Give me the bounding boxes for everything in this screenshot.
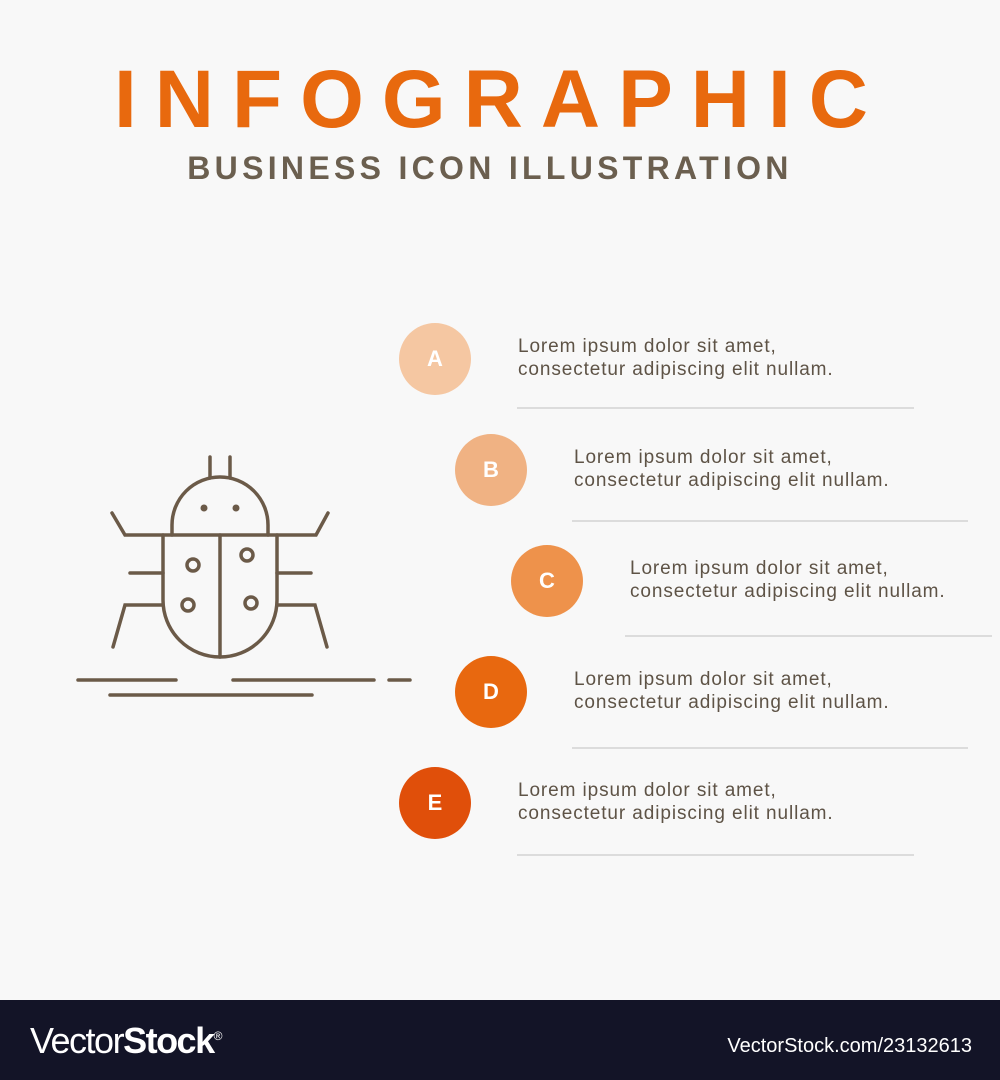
circle E: E xyxy=(428,790,442,815)
footer bar xyxy=(0,1000,1000,1080)
text E: consectetur adipiscing elit nullam. xyxy=(518,803,834,824)
text B xyxy=(574,447,890,491)
text E: Lorem ipsum dolor sit amet, xyxy=(518,780,777,801)
item A xyxy=(399,323,914,409)
text C: consectetur adipiscing elit nullam. xyxy=(630,581,946,602)
circle A xyxy=(399,323,471,395)
text B: Lorem ipsum dolor sit amet, xyxy=(574,447,833,468)
text D: Lorem ipsum dolor sit amet, xyxy=(574,669,833,690)
subtitle: BUSINESS ICON ILLUSTRATION xyxy=(187,150,793,186)
item D xyxy=(455,656,968,749)
circle B: B xyxy=(483,457,499,482)
text A: Lorem ipsum dolor sit amet, xyxy=(518,336,777,357)
text D: consectetur adipiscing elit nullam. xyxy=(574,692,890,713)
text E xyxy=(518,780,834,824)
text D xyxy=(574,669,890,713)
item B xyxy=(455,434,968,522)
item E xyxy=(399,767,914,856)
footer url: VectorStock.com/23132613 xyxy=(727,1035,972,1057)
circle D: D xyxy=(483,679,499,704)
footer logo: VectorStock® xyxy=(30,1020,221,1061)
text A xyxy=(518,336,834,380)
circle C: C xyxy=(539,568,555,593)
circle E xyxy=(399,767,471,839)
text C xyxy=(630,558,946,602)
circle B xyxy=(455,434,527,506)
text A: consectetur adipiscing elit nullam. xyxy=(518,359,834,380)
circle A: A xyxy=(427,346,443,371)
item C xyxy=(511,545,992,637)
title: INFOGRAPHIC xyxy=(114,54,886,145)
circle D xyxy=(455,656,527,728)
text C: Lorem ipsum dolor sit amet, xyxy=(630,558,889,579)
circle C xyxy=(511,545,583,617)
text B: consectetur adipiscing elit nullam. xyxy=(574,470,890,491)
